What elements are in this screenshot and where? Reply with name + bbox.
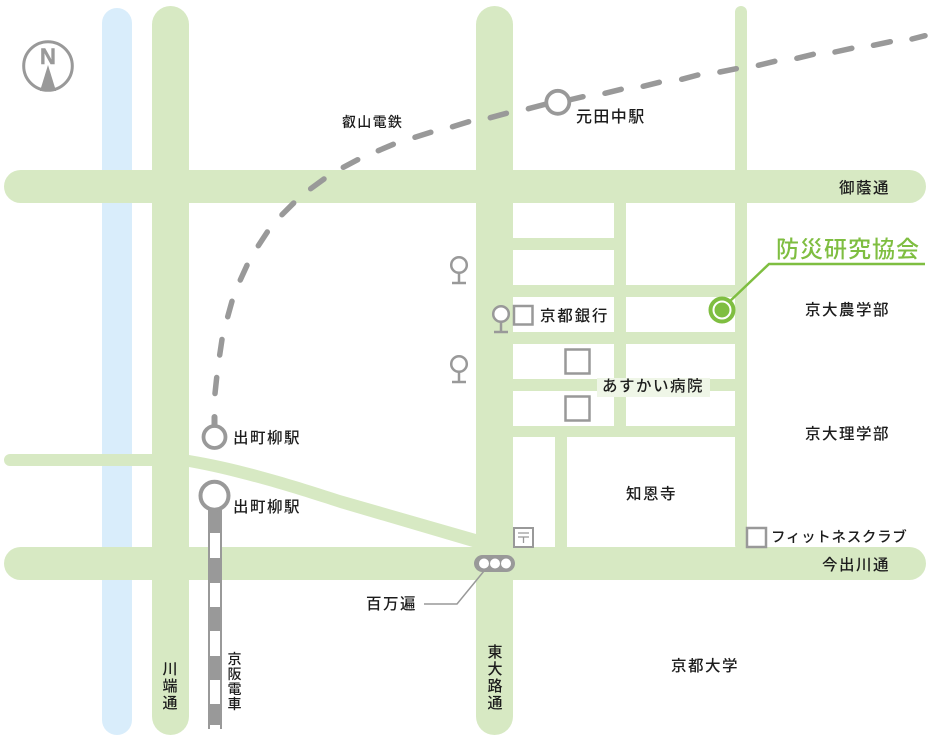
railway: Eizan line dashed: [215, 36, 925, 393]
pin 3: [451, 356, 467, 382]
road: Higashioji-dori: [476, 6, 513, 735]
label: Keihan railway: 京: [228, 651, 242, 667]
label: Imadegawa-dori: 今出川通: [822, 556, 890, 574]
river: [102, 8, 132, 735]
label: Kawabata-dori: 通: [162, 695, 178, 712]
pin 1: [451, 257, 467, 283]
label: Kawabata-dori: 川: [162, 661, 178, 678]
building: Kyoto Bank: [514, 306, 532, 324]
label: Eizan railway: 叡山電鉄: [342, 114, 403, 130]
label: Kyoto University Faculty of Agriculture: 京大農学部: [805, 301, 890, 319]
label: Kawabata-dori: 端: [162, 678, 178, 695]
label: Kyoto University: 京都大学: [671, 657, 739, 675]
label: Keihan railway: 車: [228, 696, 242, 712]
label: Asukai Hospital: あすかい病院: [602, 377, 704, 395]
label: Keihan railway: 阪: [228, 666, 242, 682]
pin 2: [493, 306, 509, 332]
label: Demachiyanagi Keihan: 出町柳駅: [233, 498, 301, 516]
station: Mototanaka: [546, 91, 569, 114]
label: Higashioji-dori: [488, 644, 503, 712]
building: fitness club: [747, 528, 766, 547]
label: Higashioji-dori: 通: [488, 695, 503, 712]
building: Asukai Hospital north: [566, 350, 590, 374]
label: Higashioji-dori: 大: [488, 661, 503, 678]
label: fitness club: フィットネスクラブ: [771, 528, 908, 546]
label: Demachiyanagi Eizan: 出町柳駅: [233, 429, 301, 447]
compass: [24, 42, 72, 91]
label: Keihan railway: 電: [228, 681, 242, 697]
station: Demachiyanagi Keihan: [200, 482, 228, 510]
road: Mikage-dori: [4, 170, 926, 203]
compass: N: [40, 44, 56, 69]
road: Kawabata-dori: [152, 6, 189, 735]
label: Chion-ji temple: 知恩寺: [626, 485, 677, 503]
label: Kawabata-dori: [162, 661, 178, 712]
label: Kyoto University Faculty of Science: 京大理学部: [805, 425, 890, 443]
marker: Bosai Kenkyu Kyokai: [710, 298, 734, 322]
railway: Keihan line: [208, 510, 222, 729]
road: Imadegawa-dori: [4, 547, 926, 580]
leader line: Bosai Kenkyu Kyokai: [728, 264, 925, 303]
leader line: Hyakumanben: [424, 571, 484, 604]
road: east side street: [735, 6, 747, 551]
road: west branch and diagonal: [4, 454, 476, 548]
road: side streets: [513, 203, 735, 547]
icon: post office: [514, 528, 533, 547]
building: Asukai Hospital south: [566, 396, 590, 420]
label: Kyoto Bank: 京都銀行: [540, 307, 609, 325]
landmark pins: west of Higashioji: [451, 257, 509, 382]
label: Mototanaka station: 元田中駅: [576, 108, 646, 126]
icon: Hyakumanben traffic signal: [474, 555, 515, 572]
label: Higashioji-dori: 路: [488, 678, 503, 695]
station: Demachiyanagi Eizan: [204, 417, 226, 448]
label: Mikage-dori: 御蔭通: [839, 179, 890, 197]
heading: Bosai Kenkyu Kyokai: 防災研究協会: [776, 236, 920, 262]
label: Keihan railway: [228, 651, 242, 712]
label: Higashioji-dori: 東: [488, 644, 503, 661]
label: Hyakumanben: 百万遍: [366, 595, 417, 613]
